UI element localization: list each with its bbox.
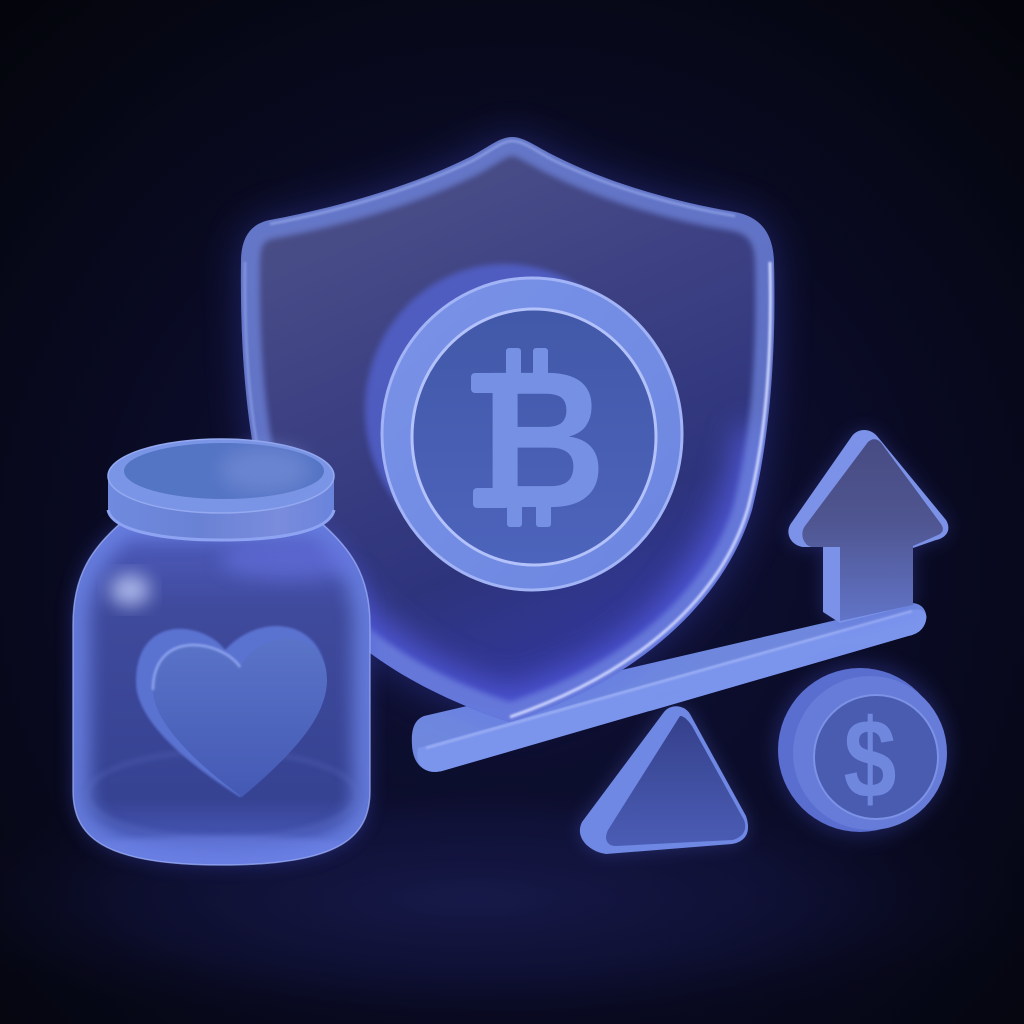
bitcoin symbol: B (481, 332, 606, 549)
balance beam back face (412, 603, 926, 772)
shield (230, 130, 790, 730)
shield rim highlight (510, 262, 770, 717)
up arrow (788, 430, 948, 623)
balance beam front face (417, 609, 926, 772)
dollar coin: $ (844, 697, 896, 822)
fulcrum triangle (580, 706, 748, 854)
dollar coin (774, 662, 950, 838)
balance beam overlap (640, 620, 926, 711)
bitcoin coin (365, 264, 682, 590)
jar lid (108, 439, 334, 540)
heart (136, 626, 327, 797)
jar (70, 439, 374, 870)
